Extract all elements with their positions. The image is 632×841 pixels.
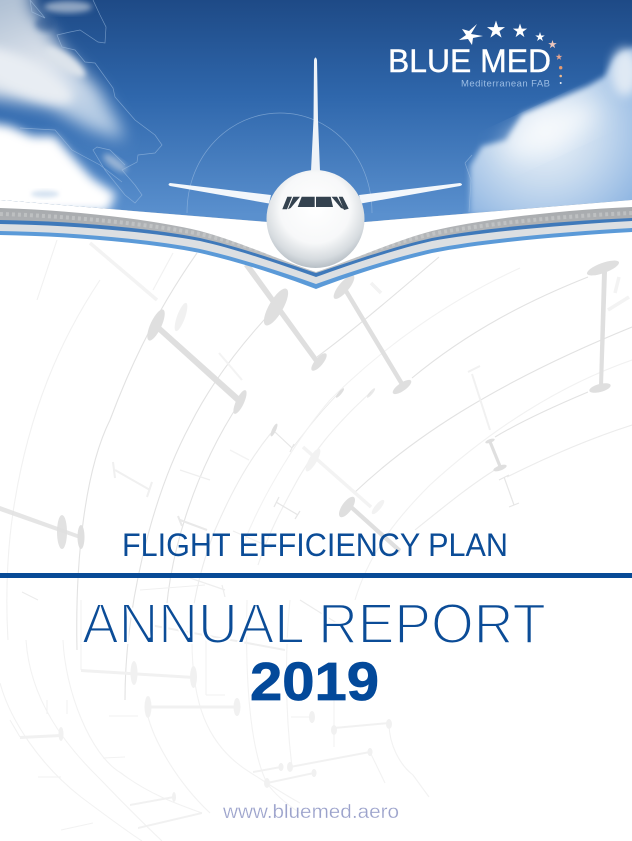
- background technical struts: upper dark: [0, 257, 621, 553]
- background ghost struts: faint wide bands: [90, 243, 629, 516]
- wing band: light blue edge: [0, 200, 632, 289]
- left tailplane: [168, 183, 271, 204]
- cloud: upper left streak: [0, 0, 129, 175]
- logo stars: [459, 20, 562, 84]
- thin map outline over the sky: [20, 0, 472, 213]
- sky background: [0, 0, 632, 240]
- heading: year 2019: 2019: [250, 652, 379, 712]
- heading: flight efficiency plan: FLIGHT EFFICIENCY PLAN: [122, 527, 508, 563]
- background technical pattern: lower faint arcs and struts: [0, 600, 429, 841]
- logo: BLUE MED: [388, 20, 562, 90]
- website url: www.bluemed.aero: [222, 802, 399, 823]
- cockpit windows: [282, 197, 349, 210]
- right tailplane: [359, 183, 462, 204]
- wing ridge texture: [0, 213, 632, 269]
- wing band: dark blue: [0, 200, 632, 277]
- background technical thin connectors and faint struts: [22, 366, 519, 650]
- logo wordmark: BLUE MED: [388, 43, 551, 79]
- background technical line pattern: upper arcs: [7, 240, 632, 700]
- horizontal rule: [0, 573, 632, 578]
- cloud: lower left white: [0, 118, 116, 212]
- tail fin: [311, 58, 320, 171]
- logo tagline: Mediterranean FAB: [461, 78, 550, 90]
- wing band: pale grey: [0, 200, 632, 284]
- aeroplane: [168, 58, 462, 268]
- fuselage nose: [266, 170, 364, 268]
- heading: annual report: ANNUAL REPORT: [82, 592, 546, 656]
- wing white upper surface: [0, 200, 632, 272]
- cloud: right: [470, 30, 632, 215]
- wing band: grey ridge: [0, 200, 632, 273]
